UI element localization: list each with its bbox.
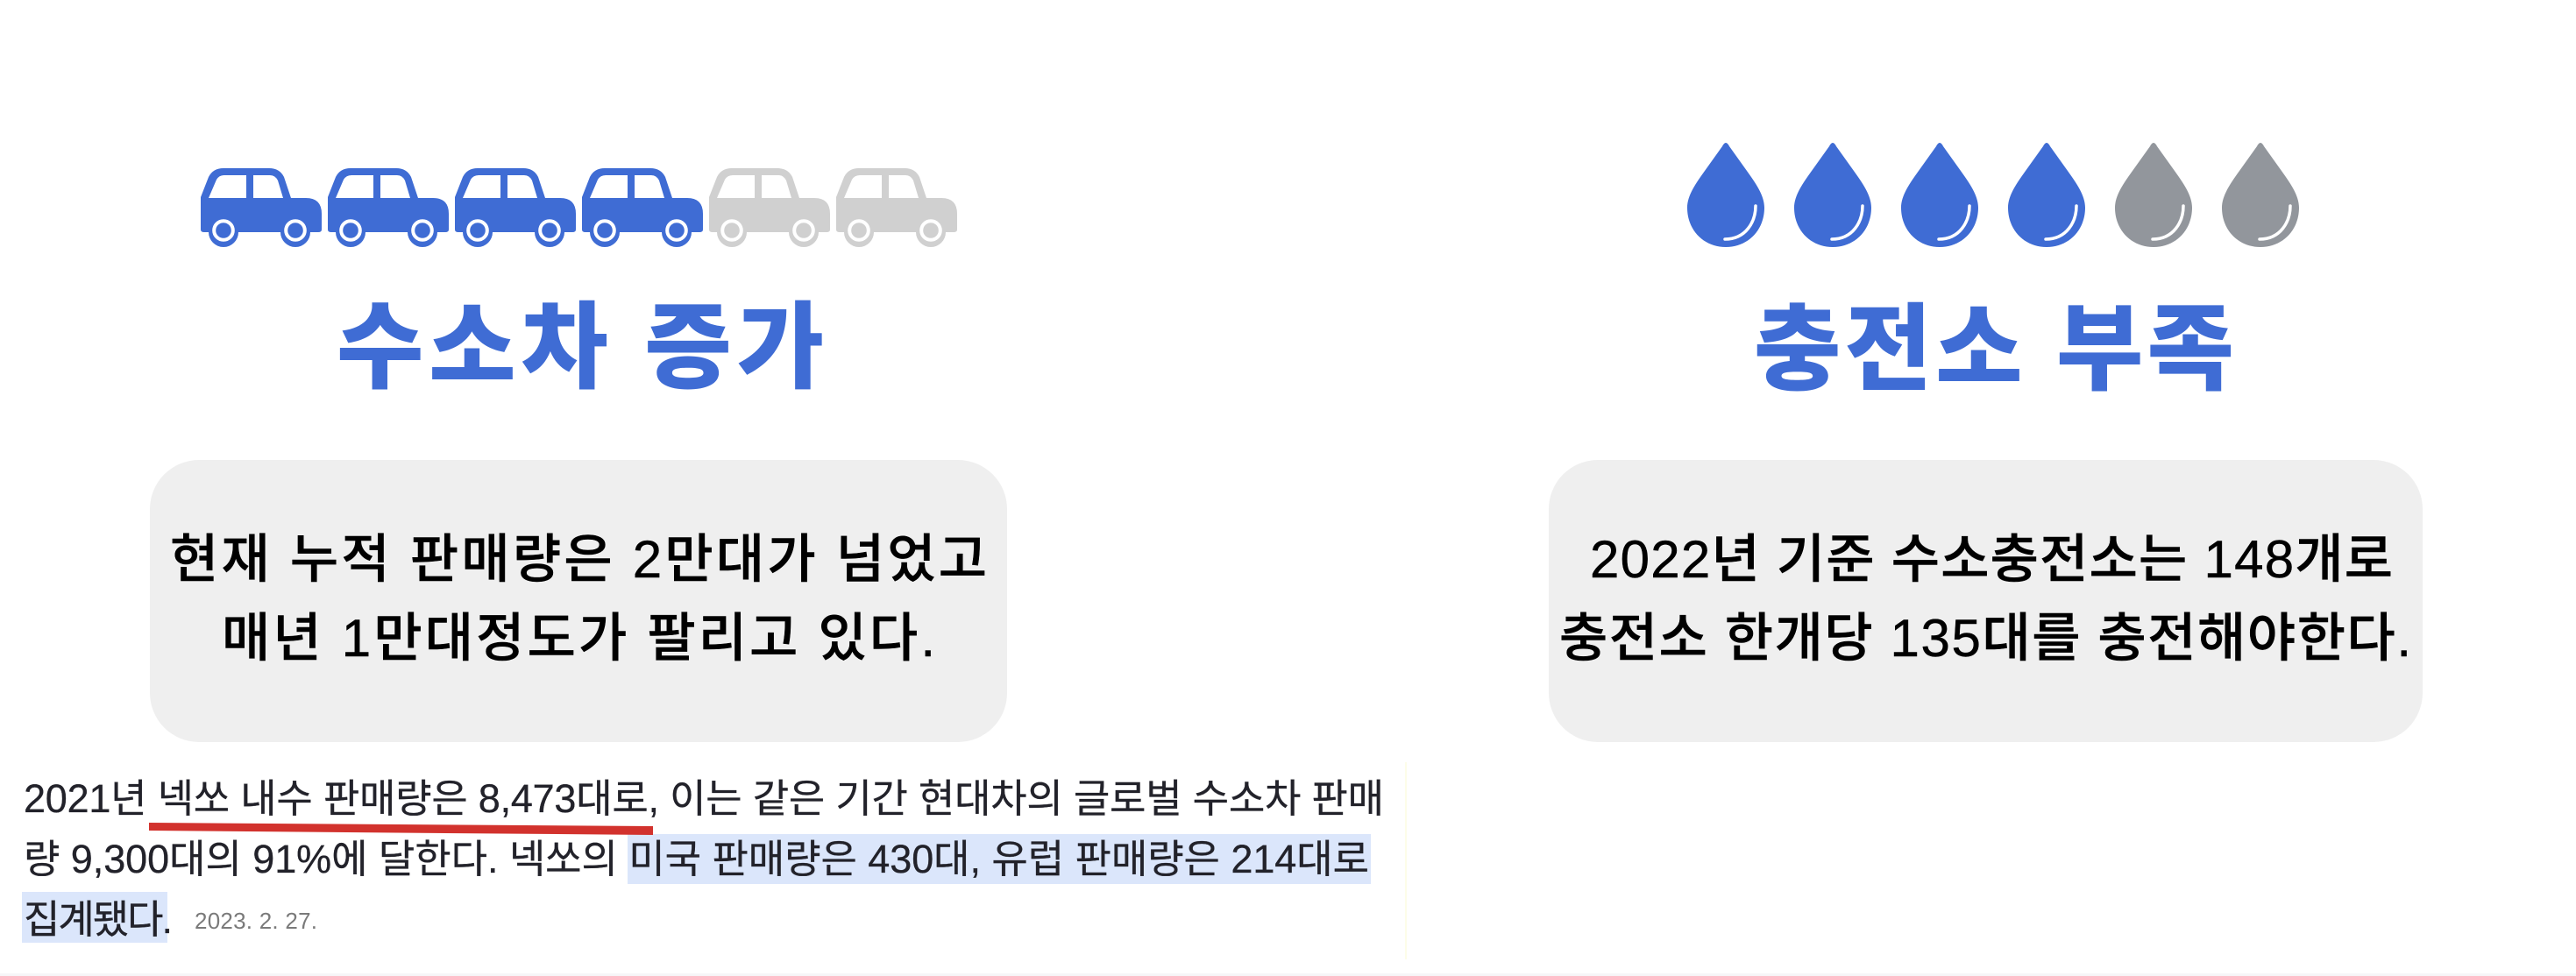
- text block: Nexo sales: 2021년 넥쏘 내수 판매량은 8,473대로, 이는 같은 기간 현대차의 글로벌 수소차 판매: [24, 776, 1384, 821]
- heading: hydrogen car increase: 수소차 증가: [337, 294, 824, 400]
- callout: cumulative sales: [150, 460, 1007, 742]
- callout: charging stations count: 충전소 한개당 135대를 충전해야한다.: [1559, 609, 2411, 668]
- highlight: overseas sales: [22, 834, 1371, 943]
- callout: charging stations count: [1549, 460, 2423, 742]
- panel: charging station shortage: [1549, 143, 2423, 742]
- icon row: six water drops, four highlighted: [1687, 143, 2299, 247]
- callout: cumulative sales: 매년 1만대정도가 팔리고 있다.: [222, 609, 935, 668]
- underline: domestic sales: [149, 823, 653, 835]
- text block: Nexo sales: 량 9,300대의 91%에 달한다. 넥쏘의 미국 판매량은 430대, 유럽 판매량은 214대로: [24, 837, 1369, 881]
- text block: Nexo sales: [24, 776, 1384, 942]
- news excerpt: [0, 762, 2576, 976]
- callout: cumulative sales: 현재 누적 판매량은 2만대가 넘었고: [170, 530, 987, 589]
- date: 2023. 2. 27.: [195, 908, 317, 934]
- icon row: six cars, four highlighted: [201, 168, 957, 247]
- callout: charging stations count: 2022년 기준 수소충전소는 148개로: [1590, 530, 2393, 589]
- text block: Nexo sales: 집계됐다.: [24, 897, 173, 942]
- panel: hydrogen car increase: [150, 168, 1007, 742]
- heading: charging station shortage: 충전소 부족: [1754, 296, 2234, 402]
